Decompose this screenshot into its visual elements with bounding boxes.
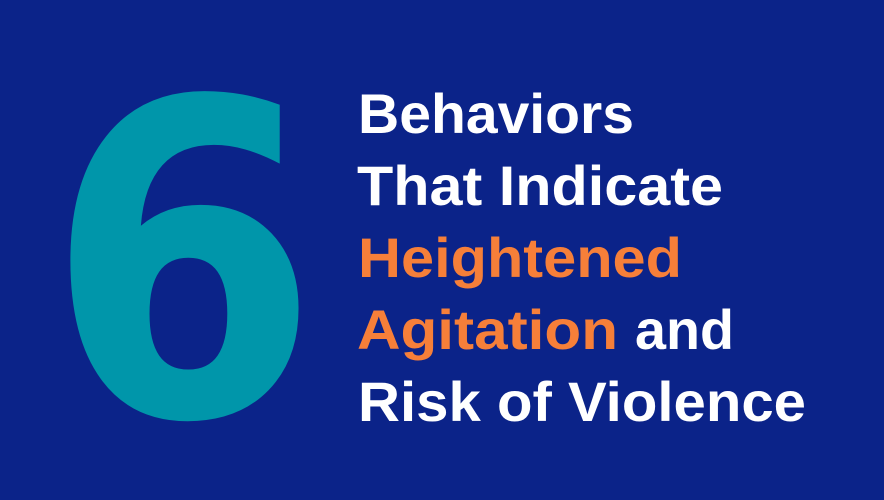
- title line: Heightened: Heightened: [358, 226, 682, 289]
- title word: and: and: [635, 298, 734, 361]
- title word: Agitation: Agitation: [357, 298, 618, 361]
- title line: Behaviors: Behaviors: [358, 82, 634, 145]
- title line: Risk of Violence: Risk of Violence: [358, 370, 806, 433]
- title: [357, 82, 806, 433]
- title line: That Indicate: That Indicate: [357, 154, 723, 217]
